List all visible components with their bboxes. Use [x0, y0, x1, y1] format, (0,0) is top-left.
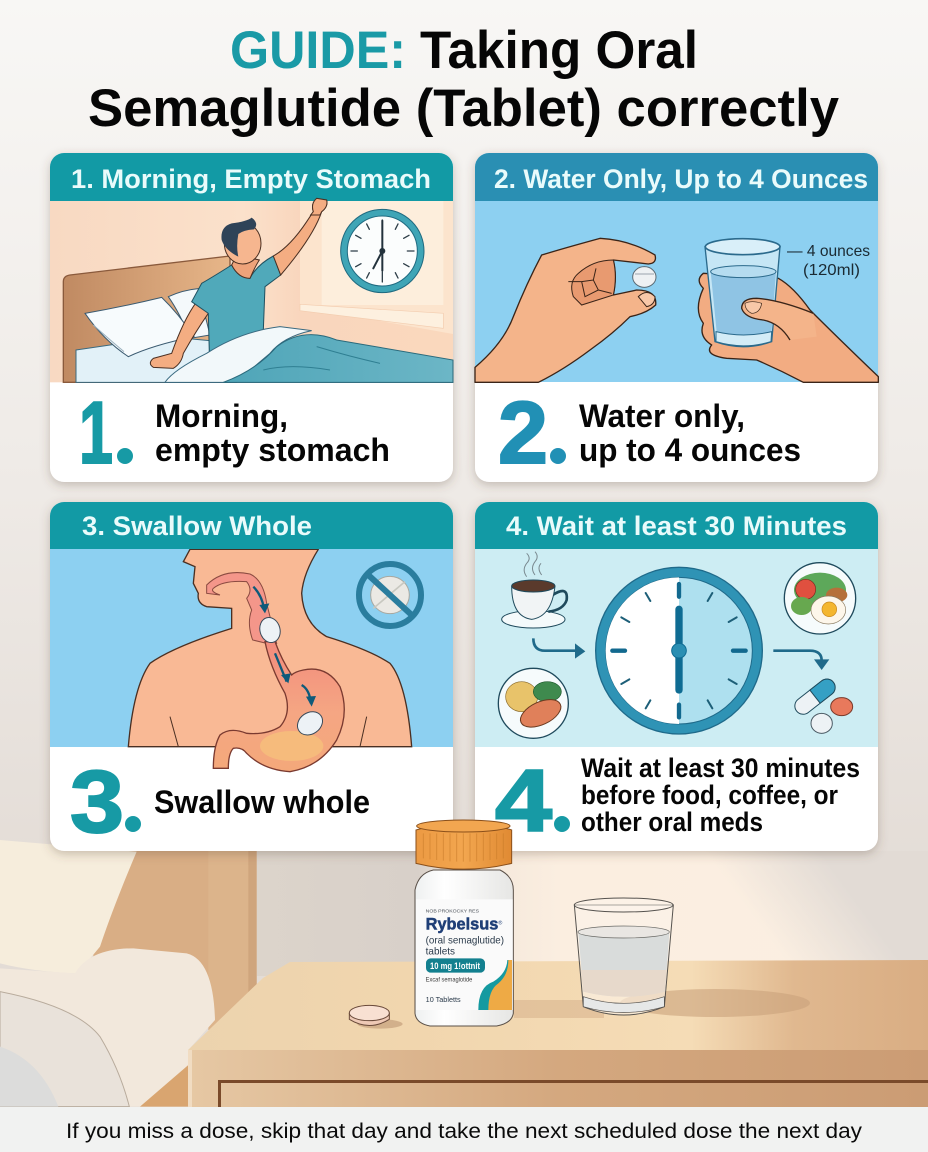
- icon: pills: [791, 676, 853, 733]
- title: Taking Oral: [420, 21, 698, 80]
- icon: hand holding glass of water: [698, 239, 878, 382]
- arrow to clock: [533, 638, 585, 659]
- header text: 1. Morning, Empty Stomach: [71, 164, 431, 194]
- icon: bottle: Excaf semaglotide: [426, 977, 473, 984]
- icon: bottle: 10 mg 1!ottnit: [430, 961, 480, 971]
- mattress and blanket: [0, 948, 215, 1107]
- illustration: body profile: [128, 549, 412, 747]
- illustration background: [50, 549, 453, 747]
- icon: bottle: ®: [498, 919, 502, 926]
- bedroom scene: [0, 840, 928, 1107]
- clock face: [596, 567, 762, 734]
- caption: [155, 398, 390, 468]
- illustration: man waking in bed: [50, 198, 453, 382]
- caption: before food, coffee, or: [581, 780, 838, 810]
- step number: 4: [495, 751, 552, 850]
- caption: [579, 398, 801, 468]
- icon: plate with salad and egg: [784, 563, 856, 634]
- caption: Water only,: [579, 398, 745, 434]
- icon: bottle: Rybelsus: [426, 914, 498, 933]
- header text: 3. Swallow Whole: [82, 511, 312, 541]
- step number: 2: [498, 383, 548, 482]
- header bar: [475, 153, 878, 201]
- panel: step 1 morning, empty stomach: [50, 153, 453, 482]
- illustration: esophagus, stomach, tablets: [170, 573, 367, 772]
- pillow: [0, 840, 137, 973]
- title: [88, 21, 840, 138]
- panel: step 4 wait 30 minutes: [475, 502, 878, 851]
- caption: Morning,: [155, 398, 288, 434]
- header text: 2. Water Only, Up to 4 Ounces: [494, 164, 868, 194]
- label: 4 ounces: — 4 ounces: [787, 243, 870, 260]
- header bar: [50, 153, 453, 201]
- header bar: [50, 502, 453, 549]
- caption: empty stomach: [155, 432, 390, 468]
- icon: bottle: 10 Tabletts: [426, 995, 461, 1004]
- illustration background: [475, 549, 878, 747]
- label: 4 ounces: [787, 243, 870, 279]
- icon: hand holding tablet: [475, 238, 656, 382]
- caption: Swallow whole: [154, 784, 370, 820]
- nightstand: [188, 960, 928, 1107]
- icon: glass of water: [574, 898, 673, 1015]
- caption: Wait at least 30 minutes: [581, 753, 860, 783]
- arrow to pills: [773, 651, 829, 670]
- header text: 4. Wait at least 30 Minutes: [506, 511, 847, 541]
- footer note: [0, 1107, 928, 1152]
- step number: [495, 751, 570, 850]
- icon: no crushing: [359, 564, 421, 626]
- panel: step 2 water only: [475, 153, 878, 482]
- title: GUIDE:: [230, 21, 406, 80]
- caption: [581, 753, 860, 837]
- icon: coffee cup: [502, 552, 567, 628]
- icon: wall clock: [341, 209, 424, 293]
- icon: bottle: NOB PROKOCKY RES: [426, 909, 480, 915]
- step number: 1: [79, 383, 113, 482]
- icon: bottle: (oral semaglutide): [426, 935, 504, 946]
- caption: other oral meds: [581, 807, 763, 837]
- label: 4 ounces: (120ml): [803, 262, 860, 279]
- title: Semaglutide (Tablet) correctly: [88, 79, 840, 138]
- icon: plate with salmon: [498, 668, 568, 738]
- wooden headboard: [93, 850, 257, 1030]
- icon: bottle: [415, 820, 513, 1026]
- icon: bottle: tablets: [426, 946, 455, 957]
- illustration background: [475, 201, 878, 382]
- step number: [70, 752, 141, 851]
- fist over header: [311, 198, 327, 215]
- step number: 3: [70, 752, 124, 851]
- footer note: If you miss a dose, skip that day and take the next scheduled dose the next day: [66, 1119, 862, 1143]
- icon: loose tablet: [349, 1005, 403, 1029]
- header bar: [475, 502, 878, 549]
- product bottle, tablet and glass: [349, 820, 673, 1029]
- caption: up to 4 ounces: [579, 432, 801, 468]
- panel: step 3 swallow whole: [50, 502, 453, 851]
